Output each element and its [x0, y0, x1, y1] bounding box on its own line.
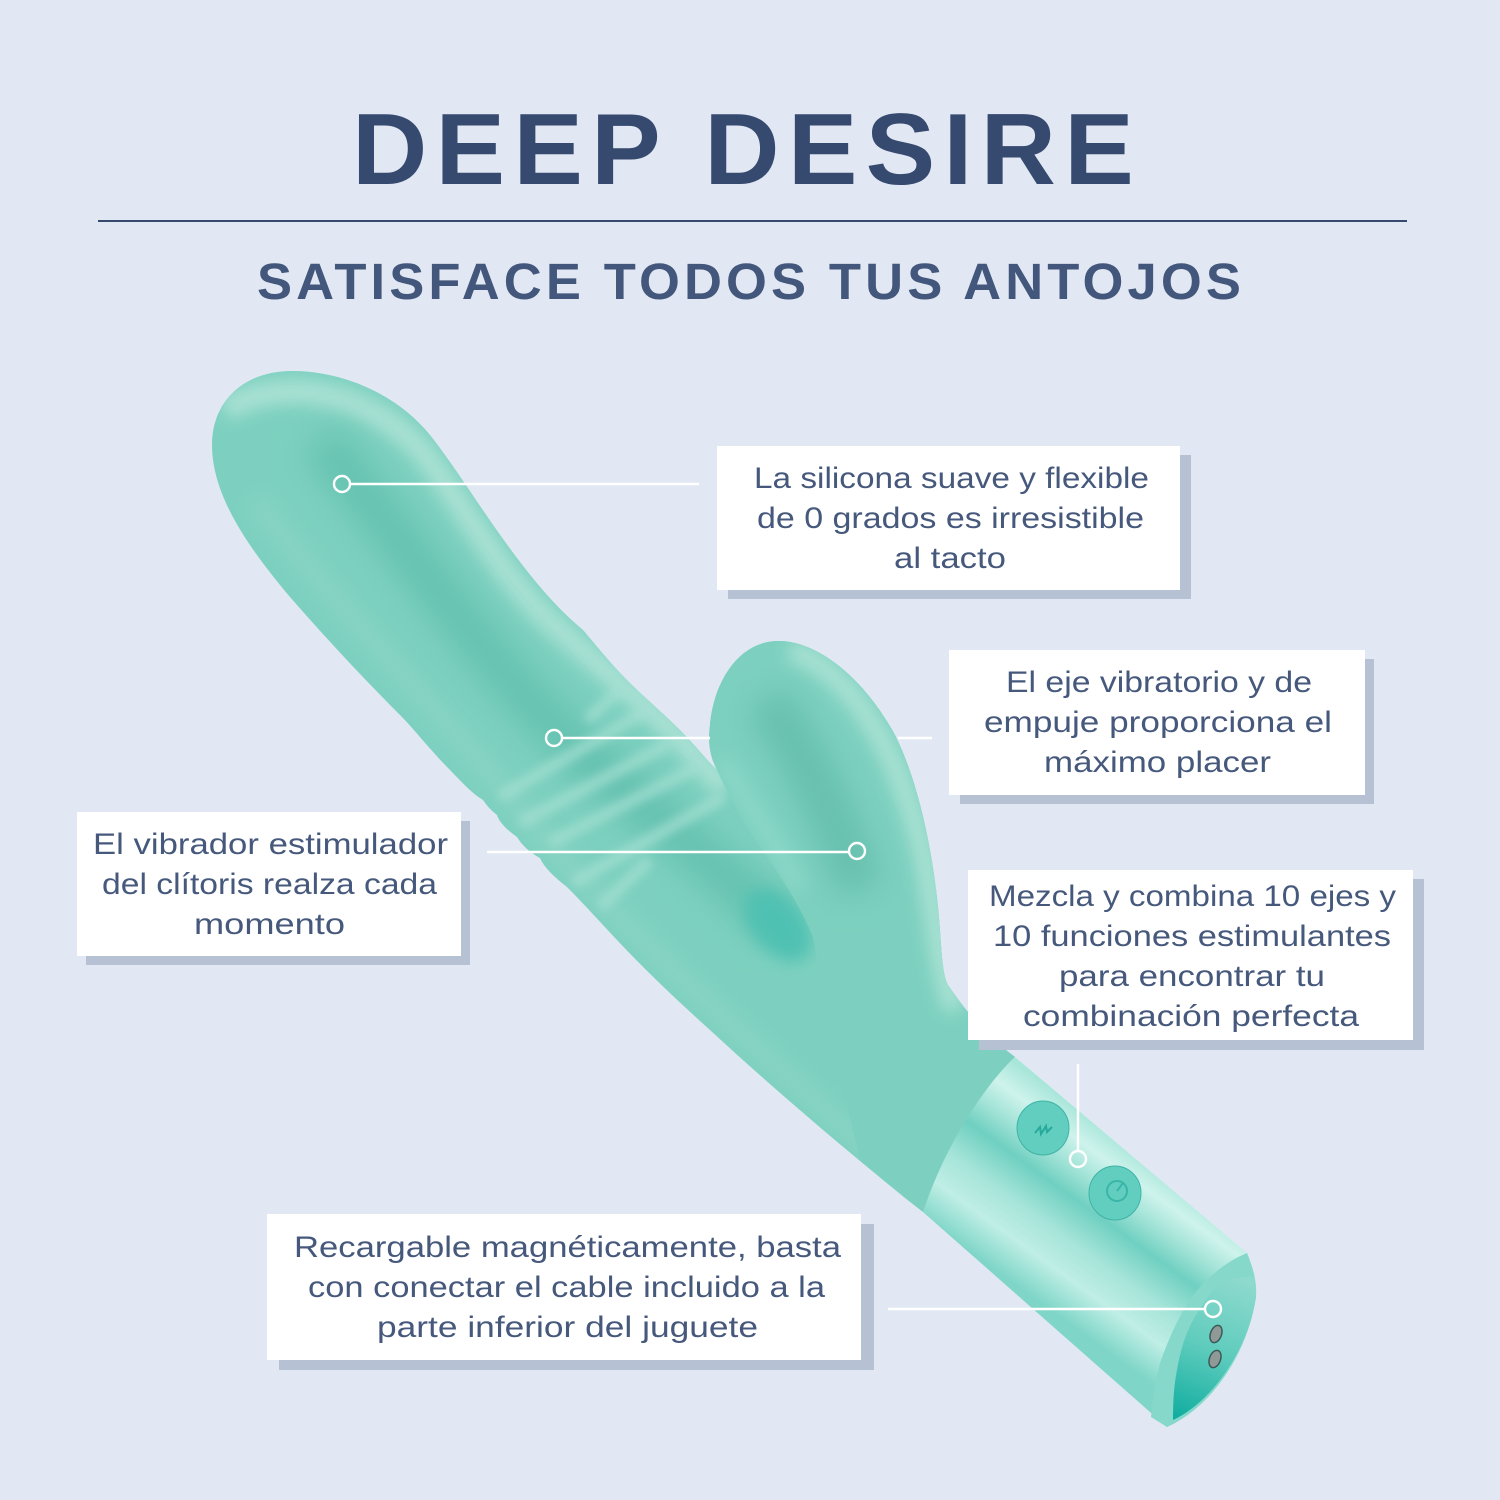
- title: DEEP DESIRE: [352, 94, 1142, 206]
- callout 1: silicone: de 0 grados es irresistible: [757, 502, 1144, 535]
- callout 5: magnetic charging: Recargable magnéticamente, basta: [294, 1231, 841, 1264]
- leader line 4: [1070, 1064, 1086, 1167]
- callout 3: clitoral stimulator: El vibrador estimulador: [93, 828, 448, 861]
- handle: [923, 1057, 1256, 1427]
- callout 4: combinations: 10 funciones estimulantes: [993, 920, 1391, 953]
- callout 4: combinations: Mezcla y combina 10 ejes y: [989, 880, 1396, 913]
- callout 3: clitoral stimulator: del clítoris realza cada: [102, 868, 437, 901]
- leader line 1: [334, 476, 699, 492]
- callout 5: magnetic charging: [267, 1214, 874, 1370]
- product illustration: [212, 371, 1256, 1427]
- callout 1: silicone: La silicona suave y flexible: [754, 462, 1149, 495]
- callout 1: silicone: al tacto: [894, 542, 1006, 575]
- button: vibration: [1017, 1101, 1069, 1155]
- callout 2: shaft: empuje proporciona el: [984, 706, 1332, 739]
- silicone body: [212, 371, 1015, 1212]
- callout 4: combinations: combinación perfecta: [1023, 1000, 1359, 1033]
- callout 4: combinations: [968, 870, 1424, 1050]
- callout 5: magnetic charging: parte inferior del juguete: [377, 1311, 758, 1344]
- callout 4: combinations: para encontrar tu: [1059, 960, 1325, 993]
- callout 1: silicone: [717, 446, 1191, 599]
- callout 2: shaft: [949, 650, 1374, 804]
- subtitle: SATISFACE TODOS TUS ANTOJOS: [257, 253, 1245, 310]
- leader line 3: [487, 843, 865, 859]
- magnetic contacts: [1207, 1324, 1224, 1369]
- ribs: [500, 687, 723, 907]
- callout 2: shaft: El eje vibratorio y de: [1006, 666, 1312, 699]
- leader line 5: [888, 1301, 1221, 1317]
- end cap: [1151, 1253, 1256, 1427]
- leader line 2: [546, 730, 932, 746]
- callout 3: clitoral stimulator: [77, 812, 470, 965]
- callout 5: magnetic charging: con conectar el cable incluido a la: [308, 1271, 825, 1304]
- button: power: [1089, 1166, 1141, 1220]
- callout 2: shaft: máximo placer: [1044, 746, 1271, 779]
- clitoral arm: [709, 641, 1015, 1212]
- callout 3: clitoral stimulator: momento: [194, 908, 345, 941]
